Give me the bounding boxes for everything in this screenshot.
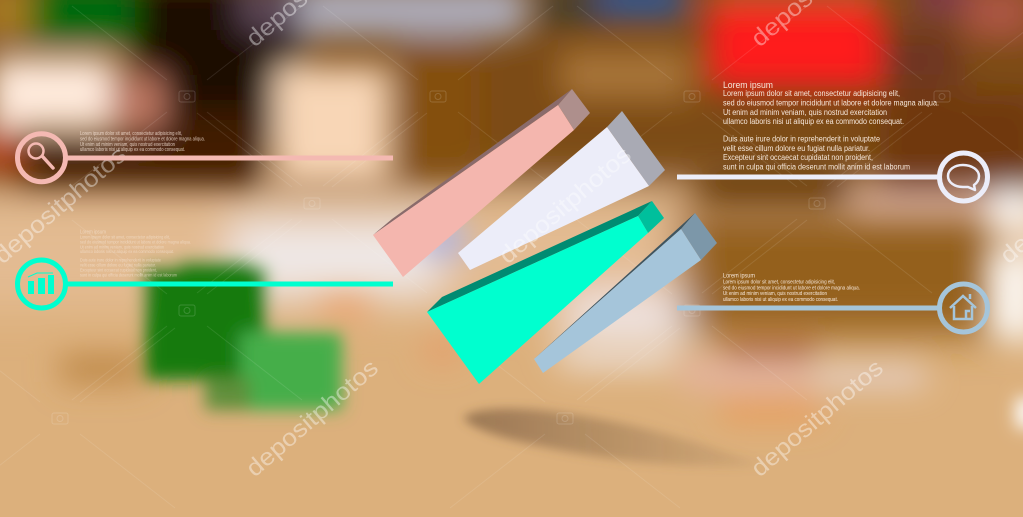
text block: lower left: sed do eiusmod tempor incididunt ut labore et dolore magna aliqua. — [80, 240, 191, 244]
text block: lower left: ullamco laboris nisi ut aliquip ex ea commodo consequat. — [80, 249, 174, 254]
text block: lower left: sunt in culpa qui officia deserunt mollit anim id est laborum — [80, 272, 177, 278]
watermark: depositphotos — [241, 354, 384, 482]
text block: top right: sed do eiusmod tempor incididunt ut labore et dolore magna aliqua. — [723, 98, 939, 108]
text block: lower right — [723, 274, 860, 303]
text block: lower right: Lorem ipsum dolor sit amet, consectetur adipisicing elit, — [723, 280, 835, 286]
watermark: depositphotos — [746, 354, 889, 482]
shadow under the shapes — [463, 409, 765, 467]
3D slice: blue — [534, 213, 717, 373]
text block: upper left: Lorem ipsum dolor sit amet, consectetur adipisicing elit, — [80, 131, 182, 137]
text block: top right: Lorem ipsum dolor sit amet, consectetur adipisicing elit, — [723, 89, 900, 98]
text block: upper left — [80, 131, 205, 153]
text block: lower left: Excepteur sint occaecat cupidatat non proident, — [80, 268, 157, 272]
text block: top right: velit esse cillum dolore eu fugiat nulla pariatur. — [723, 144, 870, 153]
3D slice: white — [458, 111, 665, 270]
text block: lower left: Lorem ipsum — [80, 230, 106, 236]
text block: top right: Lorem ipsum — [723, 80, 773, 91]
connector line: turquoise — [66, 282, 393, 286]
text block: top right: Excepteur sint occaecat cupidatat non proident, — [723, 153, 873, 162]
text block: lower left — [80, 230, 191, 278]
connector line: pink — [66, 156, 393, 160]
text block: lower right: Ut enim ad minim veniam, quis nostrud exercitation — [723, 291, 827, 297]
icon: speech bubble — [940, 153, 988, 201]
icon: house — [940, 284, 988, 332]
text block: top right: ullamco laboris nisi ut aliquip ex ea commodo consequat. — [723, 117, 904, 126]
text block: lower left: Lorem ipsum dolor sit amet, consectetur adipisicing elit, — [80, 234, 170, 240]
text block: lower right: ullamco laboris nisi ut aliquip ex ea commodo consequat. — [723, 297, 838, 303]
icon: magnifier — [18, 134, 66, 182]
watermark: depositphotos — [494, 141, 637, 269]
text block: top right — [723, 80, 939, 172]
text block: top right: sunt in culpa qui officia deserunt mollit anim id est laborum — [723, 162, 910, 172]
text block: lower left: Ut enim ad minim veniam, quis nostrud exercitation — [80, 244, 164, 250]
text block: lower left: Duis aute irure dolor in reprehenderit in voluptate — [80, 258, 161, 262]
icon: bar chart — [18, 260, 66, 308]
text block: top right: Duis aute irure dolor in reprehenderit in voluptate — [723, 134, 880, 144]
connector line: white — [677, 174, 940, 180]
text block: upper left: sed do eiusmod tempor incididunt ut labore et dolore magna aliqua. — [80, 136, 205, 142]
text block: lower right: sed do eiusmod tempor incididunt ut labore et dolore magna aliqua. — [723, 286, 860, 292]
3D slice: pink — [373, 89, 590, 277]
connector line: blue — [677, 306, 940, 310]
text block: top right: Ut enim ad minim veniam, quis nostrud exercitation — [723, 108, 887, 117]
text block: upper left: Ut enim ad minim veniam, quis nostrud exercitation — [80, 142, 175, 148]
3D slice: turquoise — [427, 201, 664, 384]
text block: upper left: ullamco laboris nisi ut aliquip ex ea commodo consequat. — [80, 147, 185, 153]
text block: lower right: Lorem ipsum — [723, 274, 755, 280]
text block: lower left: velit esse cillum dolore eu fugiat nulla pariatur. — [80, 262, 156, 268]
